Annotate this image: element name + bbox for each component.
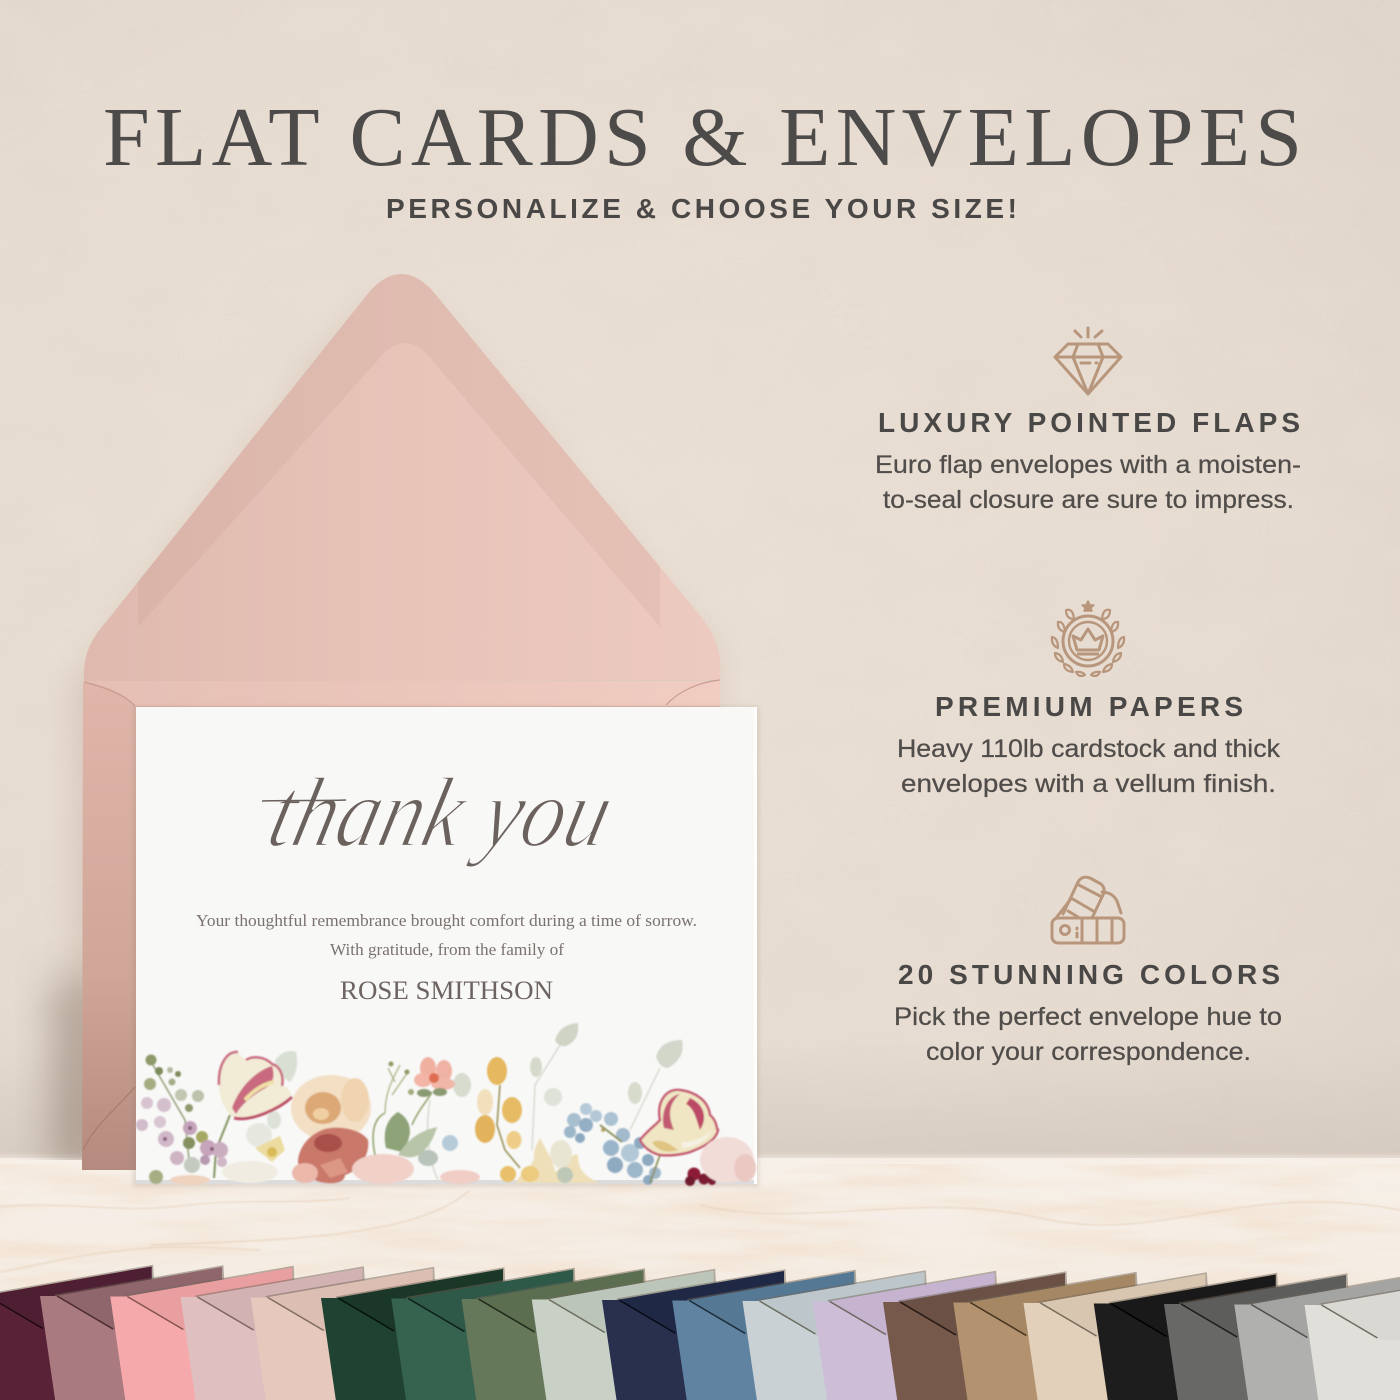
pink rose xyxy=(352,1154,414,1184)
envelope: mauve xyxy=(40,1267,223,1400)
envelope shadow xyxy=(31,657,723,1160)
card face xyxy=(136,707,757,1184)
envelope: silver xyxy=(1234,1276,1400,1400)
subtitle: PERSONALIZE & CHOOSE YOUR SIZE! xyxy=(386,193,1017,224)
card shadow xyxy=(133,706,759,1187)
icon: diamond xyxy=(1055,328,1121,394)
body line 2: envelopes with a vellum finish. xyxy=(901,770,1276,798)
pale leaves xyxy=(555,1023,578,1046)
envelope: mocha xyxy=(883,1273,1066,1400)
envelope bottom crease xyxy=(83,1087,135,1150)
feature: luxury pointed flaps xyxy=(875,328,1301,514)
heading: 20 STUNNING COLORS xyxy=(898,959,1280,990)
envelope: caramel xyxy=(953,1274,1136,1400)
envelope: dusty blue xyxy=(672,1272,855,1400)
body line 2: color your correspondence. xyxy=(926,1038,1251,1066)
envelope: navy xyxy=(602,1271,785,1400)
envelope: emerald xyxy=(391,1270,574,1400)
feature: stunning colors xyxy=(894,877,1282,1066)
envelope: black xyxy=(1094,1274,1277,1400)
yellow sprig xyxy=(475,1057,522,1182)
open flap xyxy=(84,274,720,682)
floral border xyxy=(136,1023,756,1186)
feature: premium papers xyxy=(897,601,1281,798)
envelope: burgundy xyxy=(0,1266,153,1400)
icon: crown seal xyxy=(1052,601,1124,676)
body line 2: to-seal closure are sure to impress. xyxy=(883,486,1294,514)
small blue flower xyxy=(442,1135,458,1151)
envelope: lilac xyxy=(813,1272,996,1400)
envelope: sage xyxy=(532,1270,715,1400)
body line 1: Euro flap envelopes with a moisten- xyxy=(875,451,1301,479)
heading: PREMIUM PAPERS xyxy=(935,691,1243,722)
coral flower xyxy=(414,1057,455,1097)
card name: ROSE SMITHSON xyxy=(340,976,553,1005)
envelope: olive xyxy=(462,1270,644,1400)
dark red berries xyxy=(685,1168,716,1186)
pink envelope xyxy=(55,250,720,1175)
marble surface xyxy=(0,1152,1400,1400)
script greeting: thank you xyxy=(259,757,624,868)
title: FLAT CARDS & ENVELOPES xyxy=(103,91,1302,184)
faint stems xyxy=(428,1045,660,1180)
envelope: blush pink xyxy=(110,1268,293,1400)
heading: LUXURY POINTED FLAPS xyxy=(878,407,1300,438)
peach rose xyxy=(291,1075,371,1141)
body line 1: Pick the perfect envelope hue to xyxy=(894,1003,1282,1031)
envelope: sand xyxy=(1024,1274,1206,1400)
blue hydrangea xyxy=(564,1103,661,1185)
envelope colour swatch row xyxy=(0,1266,1400,1400)
card message line 1: Your thoughtful remembrance brought comfort during a time of sorrow. xyxy=(196,911,697,930)
cream magnolia xyxy=(515,1138,600,1183)
cream flower xyxy=(170,1136,285,1185)
pale pink bloom xyxy=(700,1137,756,1183)
liner shadow band xyxy=(400,274,660,626)
envelope: petal xyxy=(251,1268,434,1400)
envelope: ivory xyxy=(1304,1276,1400,1400)
envelope: dusty rose xyxy=(180,1268,364,1400)
lilac and green sprig xyxy=(136,1054,228,1184)
icon: swatch fan xyxy=(1052,877,1124,943)
left tulip xyxy=(219,1052,292,1119)
envelope throat band xyxy=(84,681,720,706)
thank-you card xyxy=(133,706,759,1187)
envelope: charcoal xyxy=(1164,1275,1347,1400)
envelope: forest green xyxy=(321,1269,504,1400)
body line 1: Heavy 110lb cardstock and thick xyxy=(897,735,1281,763)
right tulip xyxy=(640,1090,718,1155)
green leaves centre xyxy=(373,1062,438,1166)
card message line 2: With gratitude, from the family of xyxy=(330,940,565,959)
red rose xyxy=(292,1128,368,1183)
envelope body xyxy=(82,683,720,1170)
envelope: pale blue xyxy=(742,1272,926,1400)
